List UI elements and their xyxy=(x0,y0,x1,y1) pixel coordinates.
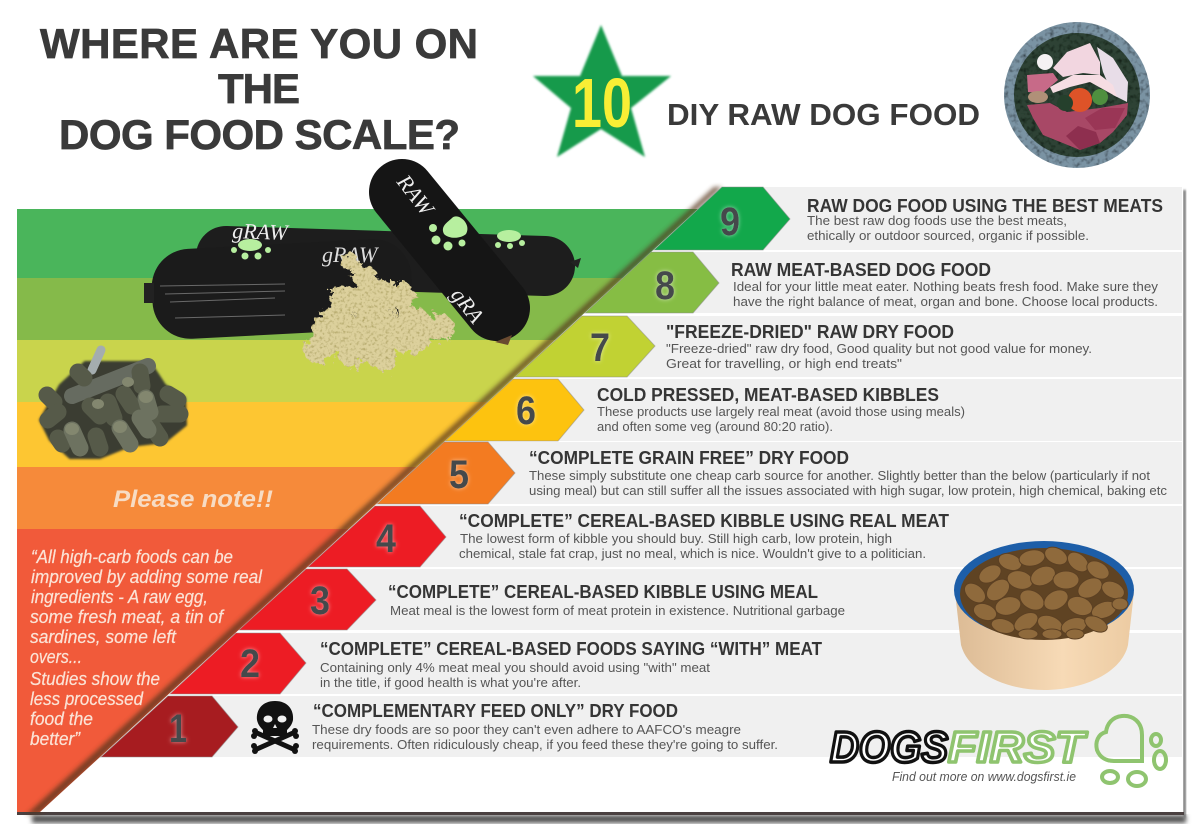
level 6 xyxy=(445,379,965,441)
main title: DOG FOOD SCALE? xyxy=(59,111,460,158)
level 1: “COMPLEMENTARY FEED ONLY” DRY FOOD xyxy=(313,701,678,721)
level 7: "FREEZE-DRIED" RAW DRY FOOD xyxy=(666,322,954,342)
level 9: The best raw dog foods use the best meats, xyxy=(807,213,1067,228)
level 1: These dry foods are so poor they can't even adhere to AAFCO's meagre xyxy=(312,722,741,737)
level 3: 3 xyxy=(310,579,330,623)
note quote text: improved by adding some real xyxy=(31,567,263,587)
icon: skull and crossbones xyxy=(251,701,299,754)
level 5 xyxy=(377,442,1168,504)
heading: DIY raw dog food: DIY RAW DOG FOOD xyxy=(667,97,980,132)
level 8 xyxy=(585,252,1158,313)
diagonal shadow xyxy=(26,187,722,815)
level 6: 6 xyxy=(516,389,536,433)
white scale panel xyxy=(40,187,1183,812)
image: raw food sausages xyxy=(144,169,581,345)
level 9: ethically or outdoor sourced, organic if possible. xyxy=(807,228,1089,243)
level 8: have the right balance of meat, organ and bone. Choose local products. xyxy=(733,294,1158,309)
level 9: 9 xyxy=(720,200,740,244)
main title: THE xyxy=(218,65,300,112)
level 2: “COMPLETE” CEREAL-BASED FOODS SAYING “WITH” MEAT xyxy=(320,639,822,659)
note quote text xyxy=(30,547,263,749)
image: kibble pellets xyxy=(40,350,186,458)
level 5: 5 xyxy=(449,453,469,497)
level 8: Ideal for your little meat eater. Nothing beats fresh food. Make sure they xyxy=(733,279,1158,294)
level 4: “COMPLETE” CEREAL-BASED KIBBLE USING REAL MEAT xyxy=(459,511,949,531)
scale background: coloured bands xyxy=(17,209,717,813)
note quote text: Studies show the xyxy=(30,669,160,689)
level 4: chemical, stale fat crap, just no meal, which is nice. Wouldn't give to a politician. xyxy=(459,546,926,561)
level 2: in the title, if good health is what you're after. xyxy=(320,675,581,690)
image: plate of raw food xyxy=(1004,22,1150,168)
star badge with number 10 xyxy=(533,25,671,157)
note quote text: sardines, some left xyxy=(30,627,177,647)
note quote text: overs... xyxy=(30,647,82,667)
level 5: These simply substitute one cheap carb source for another. Slightly better than the below (particularly if not xyxy=(529,468,1150,483)
level 6: COLD PRESSED, MEAT-BASED KIBBLES xyxy=(597,385,939,405)
level 8: 8 xyxy=(655,264,675,308)
logo caption: Find out more on www.dogsfirst.ie xyxy=(892,770,1076,784)
level 5: using meal) but can still suffer all the issues associated with high sugar, low protein, high chemical, baking etc xyxy=(529,483,1168,498)
image: raw food sausages: gRA xyxy=(446,283,489,328)
logo: Dogs First wordmark xyxy=(830,723,1087,772)
main title: WHERE ARE YOU ON xyxy=(40,20,478,67)
level 2: 2 xyxy=(240,642,260,686)
level 2 xyxy=(170,633,822,694)
image: bowl of kibble xyxy=(954,541,1134,690)
level 2: Containing only 4% meat meal you should avoid using "with" meat xyxy=(320,660,710,675)
image: raw food sausages: gRAW xyxy=(322,242,379,267)
please note heading: Please note!! xyxy=(113,486,273,513)
level 1: 1 xyxy=(169,707,187,751)
level 7: "Freeze-dried" raw dry food, Good quality but not good value for money. xyxy=(666,341,1092,356)
logo: Dogs First wordmark: DOGS xyxy=(830,723,948,772)
note quote text: less processed xyxy=(30,689,144,709)
level 7: Great for travelling, or high end treats" xyxy=(666,356,902,371)
grey row bands xyxy=(101,187,1182,757)
note quote text: better” xyxy=(30,729,81,749)
icon: paw on sausages xyxy=(231,216,525,260)
image: raw food sausages: RAW xyxy=(391,169,440,221)
card shadow xyxy=(17,190,1186,823)
star badge with number 10: 10 xyxy=(572,64,632,142)
note quote text: food the xyxy=(30,709,93,729)
logo: Dogs First wordmark: FIRST xyxy=(948,723,1087,772)
level 4: 4 xyxy=(376,517,397,561)
image: raw food sausages: gRAW xyxy=(232,218,290,245)
level 9 xyxy=(654,187,1163,250)
note quote text: “All high-carb foods can be xyxy=(31,547,233,567)
level 9: RAW DOG FOOD USING THE BEST MEATS xyxy=(807,196,1163,216)
level 4: The lowest form of kibble you should buy. Still high carb, low protein, high xyxy=(460,531,892,546)
level 8: RAW MEAT-BASED DOG FOOD xyxy=(731,260,991,280)
level 7 xyxy=(515,316,1092,377)
image: elderflower sprig xyxy=(304,253,454,371)
level 3: “COMPLETE” CEREAL-BASED KIBBLE USING MEAL xyxy=(388,582,818,602)
level 1 xyxy=(101,696,778,757)
icon: heart paw logo xyxy=(1096,716,1166,786)
level 7: 7 xyxy=(590,326,610,370)
level 5: “COMPLETE GRAIN FREE” DRY FOOD xyxy=(529,448,849,468)
level 6: These products use largely real meat (avoid those using meals) xyxy=(597,404,965,419)
level 1: requirements. Often ridiculously cheap, if you feed these they're going to suffer. xyxy=(312,737,778,752)
note quote text: ingredients - A raw egg, xyxy=(31,587,208,607)
level 6: and often some veg (around 80:20 ratio). xyxy=(597,419,833,434)
level 3 xyxy=(239,569,845,630)
note quote text: some fresh meat, a tin of xyxy=(30,607,225,627)
main title xyxy=(40,20,478,158)
level 3: Meat meal is the lowest form of meat protein in existence. Nutritional garbage xyxy=(390,603,845,618)
level 4 xyxy=(308,506,949,567)
